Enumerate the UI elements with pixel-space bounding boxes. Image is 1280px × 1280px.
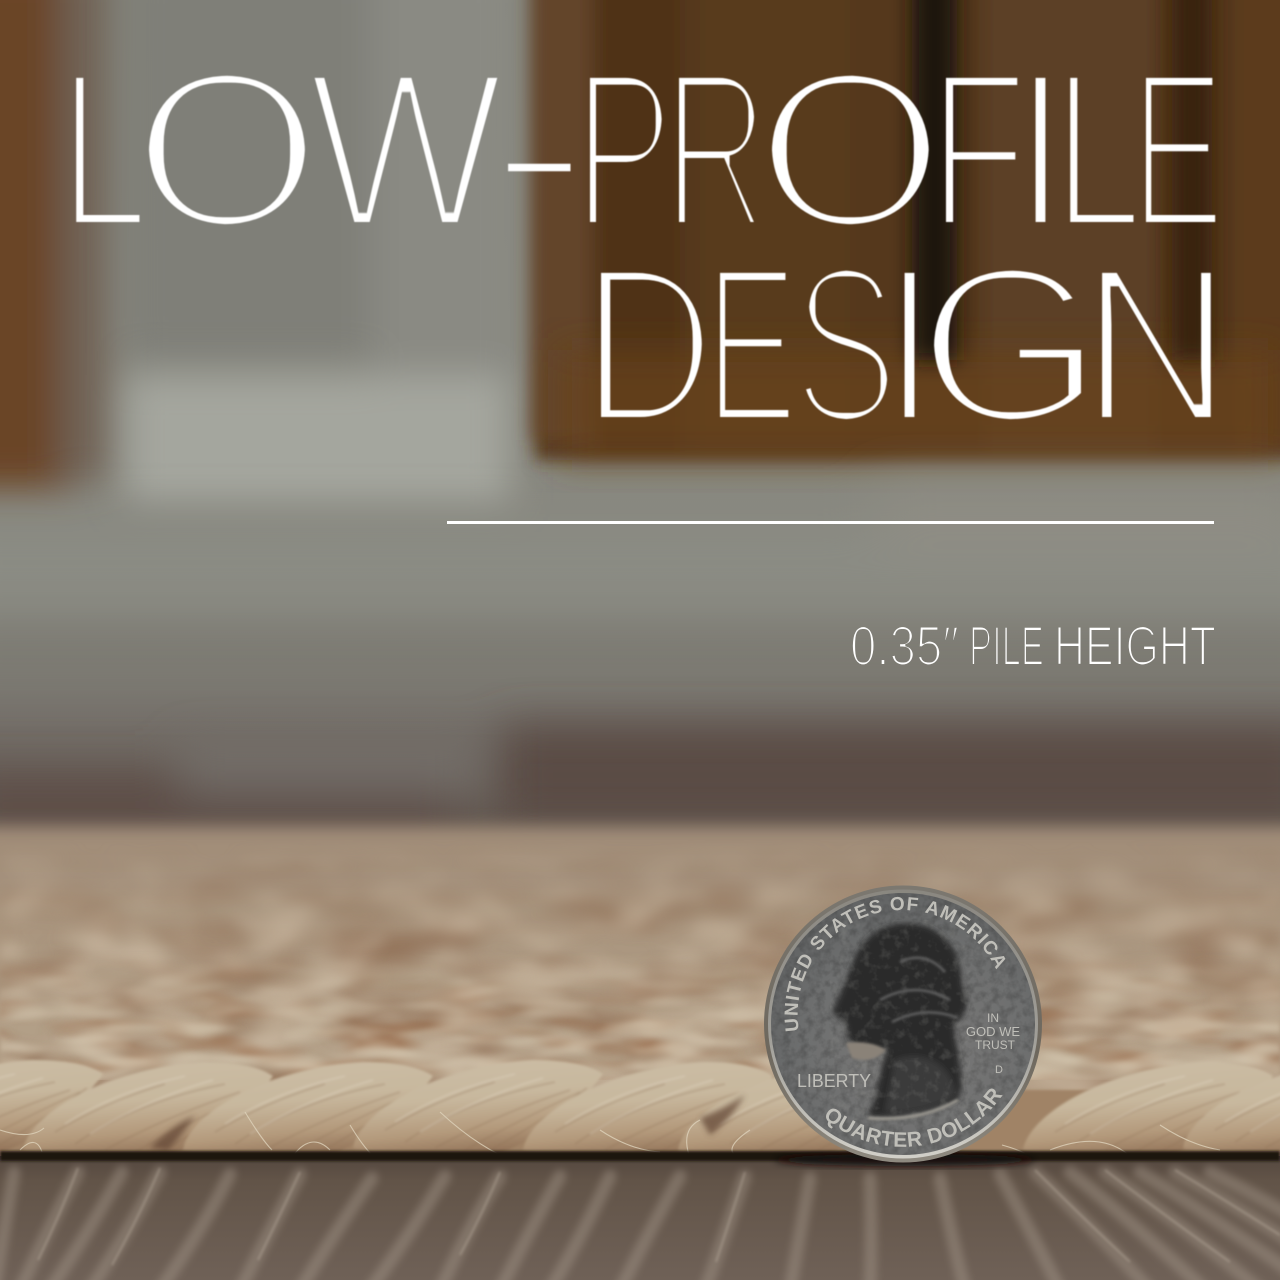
coin lettering: TRUST	[975, 1038, 1016, 1052]
pale window column	[125, 0, 520, 360]
divider rule	[447, 521, 1214, 524]
braid notches	[150, 1095, 745, 1150]
title line two: S	[793, 220, 898, 470]
stray fibres	[0, 1112, 1220, 1152]
coin lettering: D	[995, 1064, 1003, 1076]
title: LOW-PROFILE DESIGN	[59, 25, 1232, 470]
coin edge	[764, 886, 1042, 1162]
title line two: I	[883, 220, 936, 470]
coin rim	[768, 890, 1038, 1158]
dark gap under rug	[0, 1151, 1280, 1161]
rug surface	[0, 817, 1280, 1092]
coin lettering: QUARTER DOLLAR	[826, 1088, 1002, 1147]
coin lettering: UNITED STATES OF AMERICA	[784, 896, 1006, 1032]
curtain warm lower folds	[560, 350, 1280, 460]
title line one: W	[307, 25, 505, 275]
title line one: F	[929, 25, 1028, 275]
title line one: L	[59, 25, 149, 275]
quarter coin	[764, 886, 1042, 1170]
curtain dark folds	[912, 0, 957, 360]
title line one: E	[1130, 25, 1225, 275]
coin lettering: GOD WE	[966, 1024, 1020, 1039]
coin lettering: IN	[987, 1011, 999, 1025]
coin lettering: LIBERTY	[797, 1071, 871, 1091]
dark floor band	[0, 775, 460, 835]
title line two: D	[582, 220, 715, 470]
pile height caption: HEIGHT	[1054, 614, 1216, 677]
title line one: R	[663, 25, 769, 275]
title line one: O	[134, 25, 320, 275]
left curtain	[0, 0, 75, 490]
coin face	[770, 892, 1036, 1156]
title line one: -	[491, 25, 587, 275]
sofa band	[0, 525, 1280, 600]
title line two: E	[704, 220, 798, 470]
title line one: P	[574, 25, 674, 275]
portrait	[832, 923, 967, 1117]
title line one: L	[1053, 25, 1143, 275]
coin shadow	[775, 1154, 1035, 1166]
rug braid edge	[0, 1060, 1280, 1160]
title line one: O	[756, 25, 944, 275]
right brown curtain	[535, 0, 1280, 460]
title line one: I	[1014, 25, 1067, 275]
title line two: N	[1081, 220, 1232, 470]
wood floor	[0, 1156, 1280, 1280]
pile height caption: 0.35″	[850, 614, 959, 677]
background: blurred room interior	[0, 0, 1280, 840]
coin lettering	[784, 896, 1020, 1147]
title line two: G	[918, 220, 1103, 470]
pile height caption: PILE	[969, 614, 1044, 677]
